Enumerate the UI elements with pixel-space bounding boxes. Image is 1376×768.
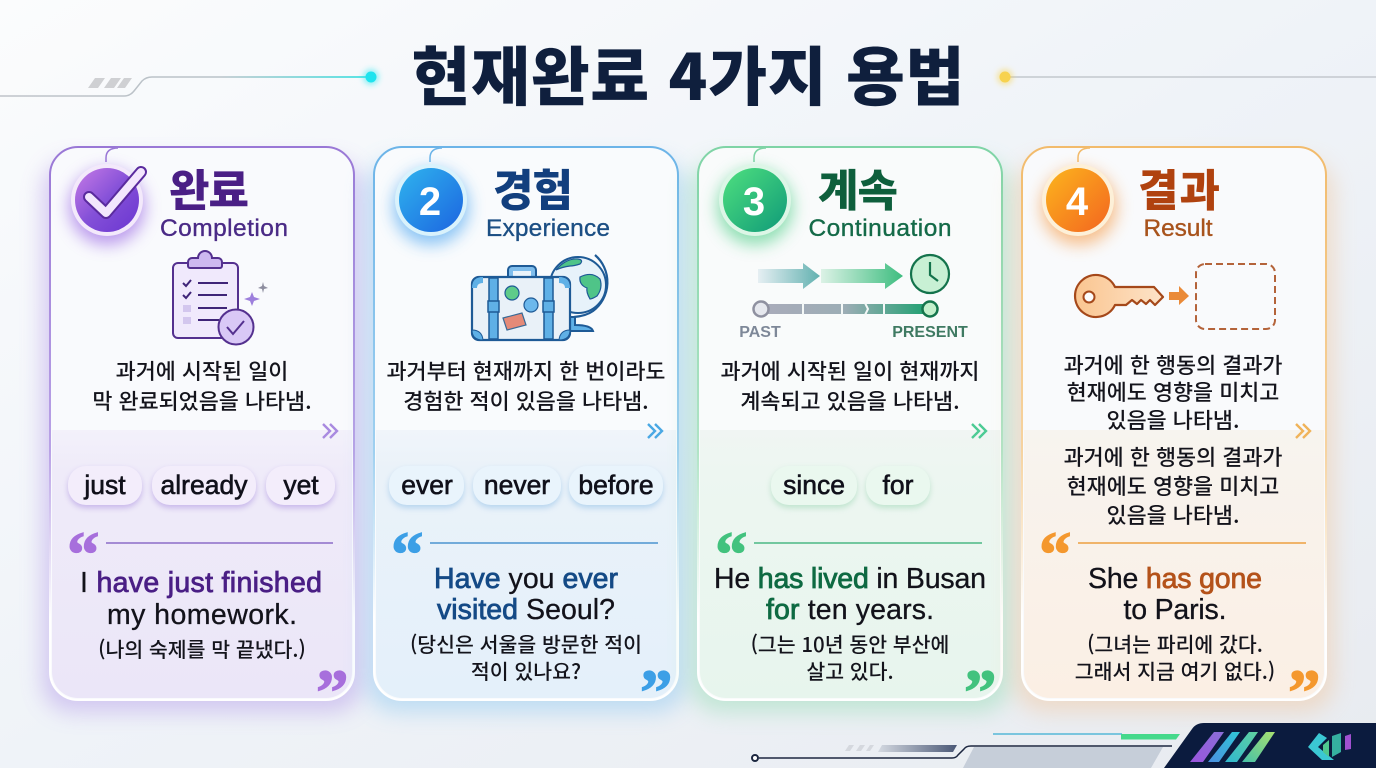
repeated description (1064, 441, 1282, 530)
keyword pills (68, 466, 335, 505)
badge: 4 (1041, 164, 1117, 245)
description: 막 완료되었음을 나타냄. (92, 385, 312, 416)
keyword pills: never (484, 470, 550, 500)
repeated description: 과거에 한 행동의 결과가 (1064, 441, 1282, 472)
quote close mark: ” (1288, 657, 1320, 729)
example sentence: 적이 있나요? (471, 655, 581, 685)
example sentence (1075, 563, 1275, 685)
description: 현재에도 영향을 미치고 (1067, 376, 1279, 407)
quote close mark: ” (316, 657, 348, 729)
keyword pills: before (578, 470, 654, 500)
repeated description: 있음을 나타냄. (1107, 499, 1239, 530)
badge: 2: 2 (419, 180, 441, 224)
heading: 경험 (493, 155, 573, 219)
icon: key to empty box (1075, 264, 1275, 329)
repeated description: 현재에도 영향을 미치고 (1067, 470, 1279, 501)
badge: 3: 3 (743, 180, 765, 224)
description (92, 355, 312, 416)
subheading: Experience (486, 215, 610, 242)
example sentence (714, 563, 986, 685)
example sentence: 살고 있다. (806, 655, 894, 685)
example sentence (410, 563, 642, 685)
example sentence: to Paris. (1124, 594, 1226, 626)
icon: timeline with arrows and clock: PRESENT (892, 324, 968, 341)
example sentence: (그는 10년 동안 부산에 (751, 628, 949, 658)
example sentence: He has lived in Busan (714, 563, 986, 595)
title: 현재완료 4가지 용법 (412, 27, 964, 119)
bottom circuit decoration (752, 734, 1180, 768)
badge: 2 (393, 164, 469, 245)
top left circuit line (0, 69, 379, 96)
description: 경험한 적이 있음을 나타냄. (403, 385, 649, 416)
badge: 3 (717, 164, 793, 245)
icon: suitcase and globe (472, 255, 607, 340)
chevrons (323, 424, 337, 438)
keyword pills: just (83, 470, 126, 500)
keyword pills: yet (283, 470, 319, 500)
heading: 결과 (1138, 155, 1220, 219)
keyword pills (389, 466, 663, 505)
chevrons (1296, 424, 1310, 438)
panel: 경험 Experience (366, 147, 686, 729)
description (1064, 349, 1282, 435)
subheading: Result (1144, 215, 1213, 242)
badge: check (69, 164, 145, 245)
quote open mark: “ (715, 519, 748, 591)
description (721, 355, 979, 416)
logo stripes (1190, 732, 1275, 762)
heading: 계속 (818, 155, 898, 219)
example sentence (80, 567, 322, 663)
quote close mark: ” (964, 657, 996, 729)
example sentence: visited Seoul? (437, 594, 615, 626)
keyword pills: already (161, 470, 248, 500)
keyword pills: for (883, 470, 914, 500)
chevrons (648, 424, 662, 438)
keyword pills: since (783, 470, 845, 500)
panel: 완료 Completion (42, 147, 362, 729)
quote open mark: “ (67, 519, 100, 591)
quote open mark: “ (1039, 519, 1072, 591)
corner brand block (1164, 723, 1376, 768)
example sentence: I have just finished (80, 567, 322, 599)
example sentence: (나의 숙제를 막 끝냈다.) (98, 633, 306, 663)
example sentence: Have you ever (434, 563, 618, 595)
description: 과거에 시작된 일이 (116, 355, 288, 386)
example sentence: 그래서 지금 여기 없다.) (1075, 655, 1275, 685)
description: 있음을 나타냄. (1107, 404, 1239, 435)
icon: clipboard (173, 251, 268, 344)
quote open mark: “ (391, 519, 424, 591)
quote close mark: ” (640, 657, 672, 729)
description: 과거부터 현재까지 한 번이라도 (386, 355, 666, 386)
keyword pills: ever (401, 470, 453, 500)
badge: 4: 4 (1066, 180, 1089, 224)
heading: 완료 (169, 155, 249, 219)
subheading: Continuation (808, 215, 952, 242)
example sentence: She has gone (1088, 563, 1262, 595)
panel: 결과 Result (1014, 147, 1334, 729)
example sentence: for ten years. (766, 594, 934, 626)
example sentence: (당신은 서울을 방문한 적이 (410, 628, 642, 658)
chevrons (972, 424, 986, 438)
icon: timeline with arrows and clock (739, 255, 968, 341)
description (386, 355, 666, 416)
description: 계속되고 있음을 나타냄. (740, 385, 960, 416)
keyword pills (771, 466, 930, 505)
example sentence: my homework. (107, 599, 297, 631)
description: 과거에 시작된 일이 현재까지 (721, 355, 979, 386)
logo mark (1308, 733, 1351, 760)
subheading: Completion (160, 215, 288, 242)
top right circuit line (997, 69, 1376, 85)
icon: timeline with arrows and clock: PAST (739, 324, 781, 341)
panel: 계속 Continuation (690, 147, 1010, 729)
description: 과거에 한 행동의 결과가 (1064, 349, 1282, 380)
example sentence: (그녀는 파리에 갔다. (1087, 628, 1263, 658)
